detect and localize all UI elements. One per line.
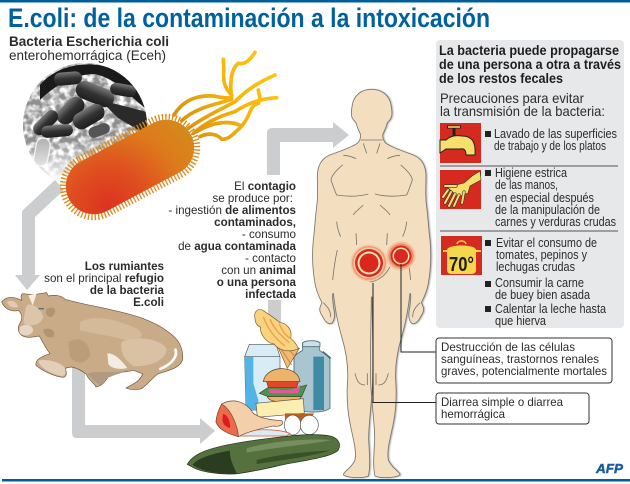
callout: destruction of cells: Destrucción de las células (441, 340, 575, 354)
target: large ring (350, 244, 388, 282)
AFP logo: AFP (595, 461, 623, 476)
top rule (0, 0, 630, 2)
plate (238, 430, 290, 436)
microscope photo (23, 63, 147, 184)
callout: diarrhoea: Diarrea simple o diarrea (441, 395, 563, 409)
text: contagio: infectada (245, 288, 297, 301)
text: pot: Calentar la leche hasta (495, 302, 606, 316)
illustration: food pile (187, 310, 340, 474)
text: contagio: - contacto (245, 252, 296, 265)
panel subheading: Precauciones para evitar (440, 90, 584, 106)
panel heading (439, 43, 621, 86)
bottom rule (2, 479, 630, 482)
text: rumiantes: Los rumiantes (85, 260, 164, 273)
panel heading: de una persona a otra a través (439, 57, 621, 72)
text: pot: que hierva (495, 314, 546, 328)
text: rumiantes: son el principal refugio (44, 272, 164, 285)
text: pot: de buey bien asada (495, 288, 590, 302)
arrow: cow to food (72, 365, 215, 444)
text: pot: tomates, pepinos y (496, 248, 588, 262)
panel: precautions (436, 40, 624, 328)
callout: destruction of cells: sanguíneas, trastornos renales (441, 352, 599, 366)
burger (259, 369, 307, 402)
bacterium (53, 107, 207, 227)
text: pot: Evitar el consumo de (496, 236, 597, 250)
cheese (256, 399, 304, 417)
leader line: lower callout (373, 283, 436, 402)
panel subheading: la transmisión de la bacteria: (440, 103, 605, 119)
panel heading: La bacteria puede propagarse (439, 43, 619, 58)
icon: flagella (174, 52, 277, 139)
illustration: cow (2, 293, 183, 390)
panel heading: de los restos fecales (439, 71, 563, 86)
text: tap: de trabajo y de los platos (494, 139, 606, 153)
illustration: human body (313, 89, 431, 478)
text: contagio: - consumo (242, 228, 296, 241)
text: contagio: de agua contaminada (178, 240, 297, 253)
text: contagio: contaminados, (214, 216, 296, 229)
bacteria heading (9, 34, 169, 63)
icon: pot 70 degrees (441, 236, 482, 276)
text: rumiantes: de la bacteria (90, 284, 165, 297)
milk can (294, 341, 331, 412)
text: contagio: o una persona (217, 276, 297, 289)
callout: diarrhoea: hemorrágica (441, 407, 505, 421)
cucumber (187, 435, 340, 474)
text: hand (485, 166, 616, 229)
text: pot: lechugas crudas (496, 260, 575, 274)
target: small ring (386, 242, 416, 270)
text: hand: Higiene estrica (495, 166, 567, 180)
icon: tap (440, 123, 481, 163)
panel subheading (440, 90, 605, 119)
text: contagio: - ingestión de alimentos (168, 204, 296, 217)
text: tap (485, 127, 617, 153)
arrow: food to person (upper part) (267, 122, 349, 175)
text: hand: de la manipulación de (495, 203, 600, 217)
leader line: upper callout (401, 264, 436, 352)
milk carton (245, 344, 280, 410)
callout: destruction of cells (436, 338, 612, 383)
title: E.coli: de la contaminación a la intoxicación (8, 3, 490, 33)
bacteria heading: enterohemorrágica (Eceh) (9, 48, 166, 63)
text: contagio: El contagio (234, 180, 296, 193)
text: pot: Consumir la carne (495, 276, 584, 290)
text: hand: de las manos, (495, 178, 558, 192)
ice cream (255, 310, 299, 368)
text: contagio: con un animal (221, 264, 296, 277)
bacteria heading: Bacteria Escherichia coli (9, 34, 169, 49)
text: pot (485, 236, 606, 328)
text: contagio: se produce por: (212, 192, 293, 205)
callout: diarrhoea (436, 393, 589, 424)
meat shadow (285, 413, 314, 423)
eggs (284, 415, 318, 435)
text: rumiantes (44, 260, 165, 309)
callout: destruction of cells: graves, potencialmente mortales (441, 364, 607, 378)
text: contagio (168, 180, 297, 301)
icon: hand (440, 170, 481, 209)
arrow: microscope to cow (15, 180, 64, 290)
arrow: food to person (lower part) (268, 300, 281, 324)
text: hand: en especial después (495, 191, 594, 205)
ham (216, 401, 283, 437)
icon: pot 70 degrees: 70° (449, 254, 474, 276)
text: rumiantes: E.coli (133, 296, 164, 309)
